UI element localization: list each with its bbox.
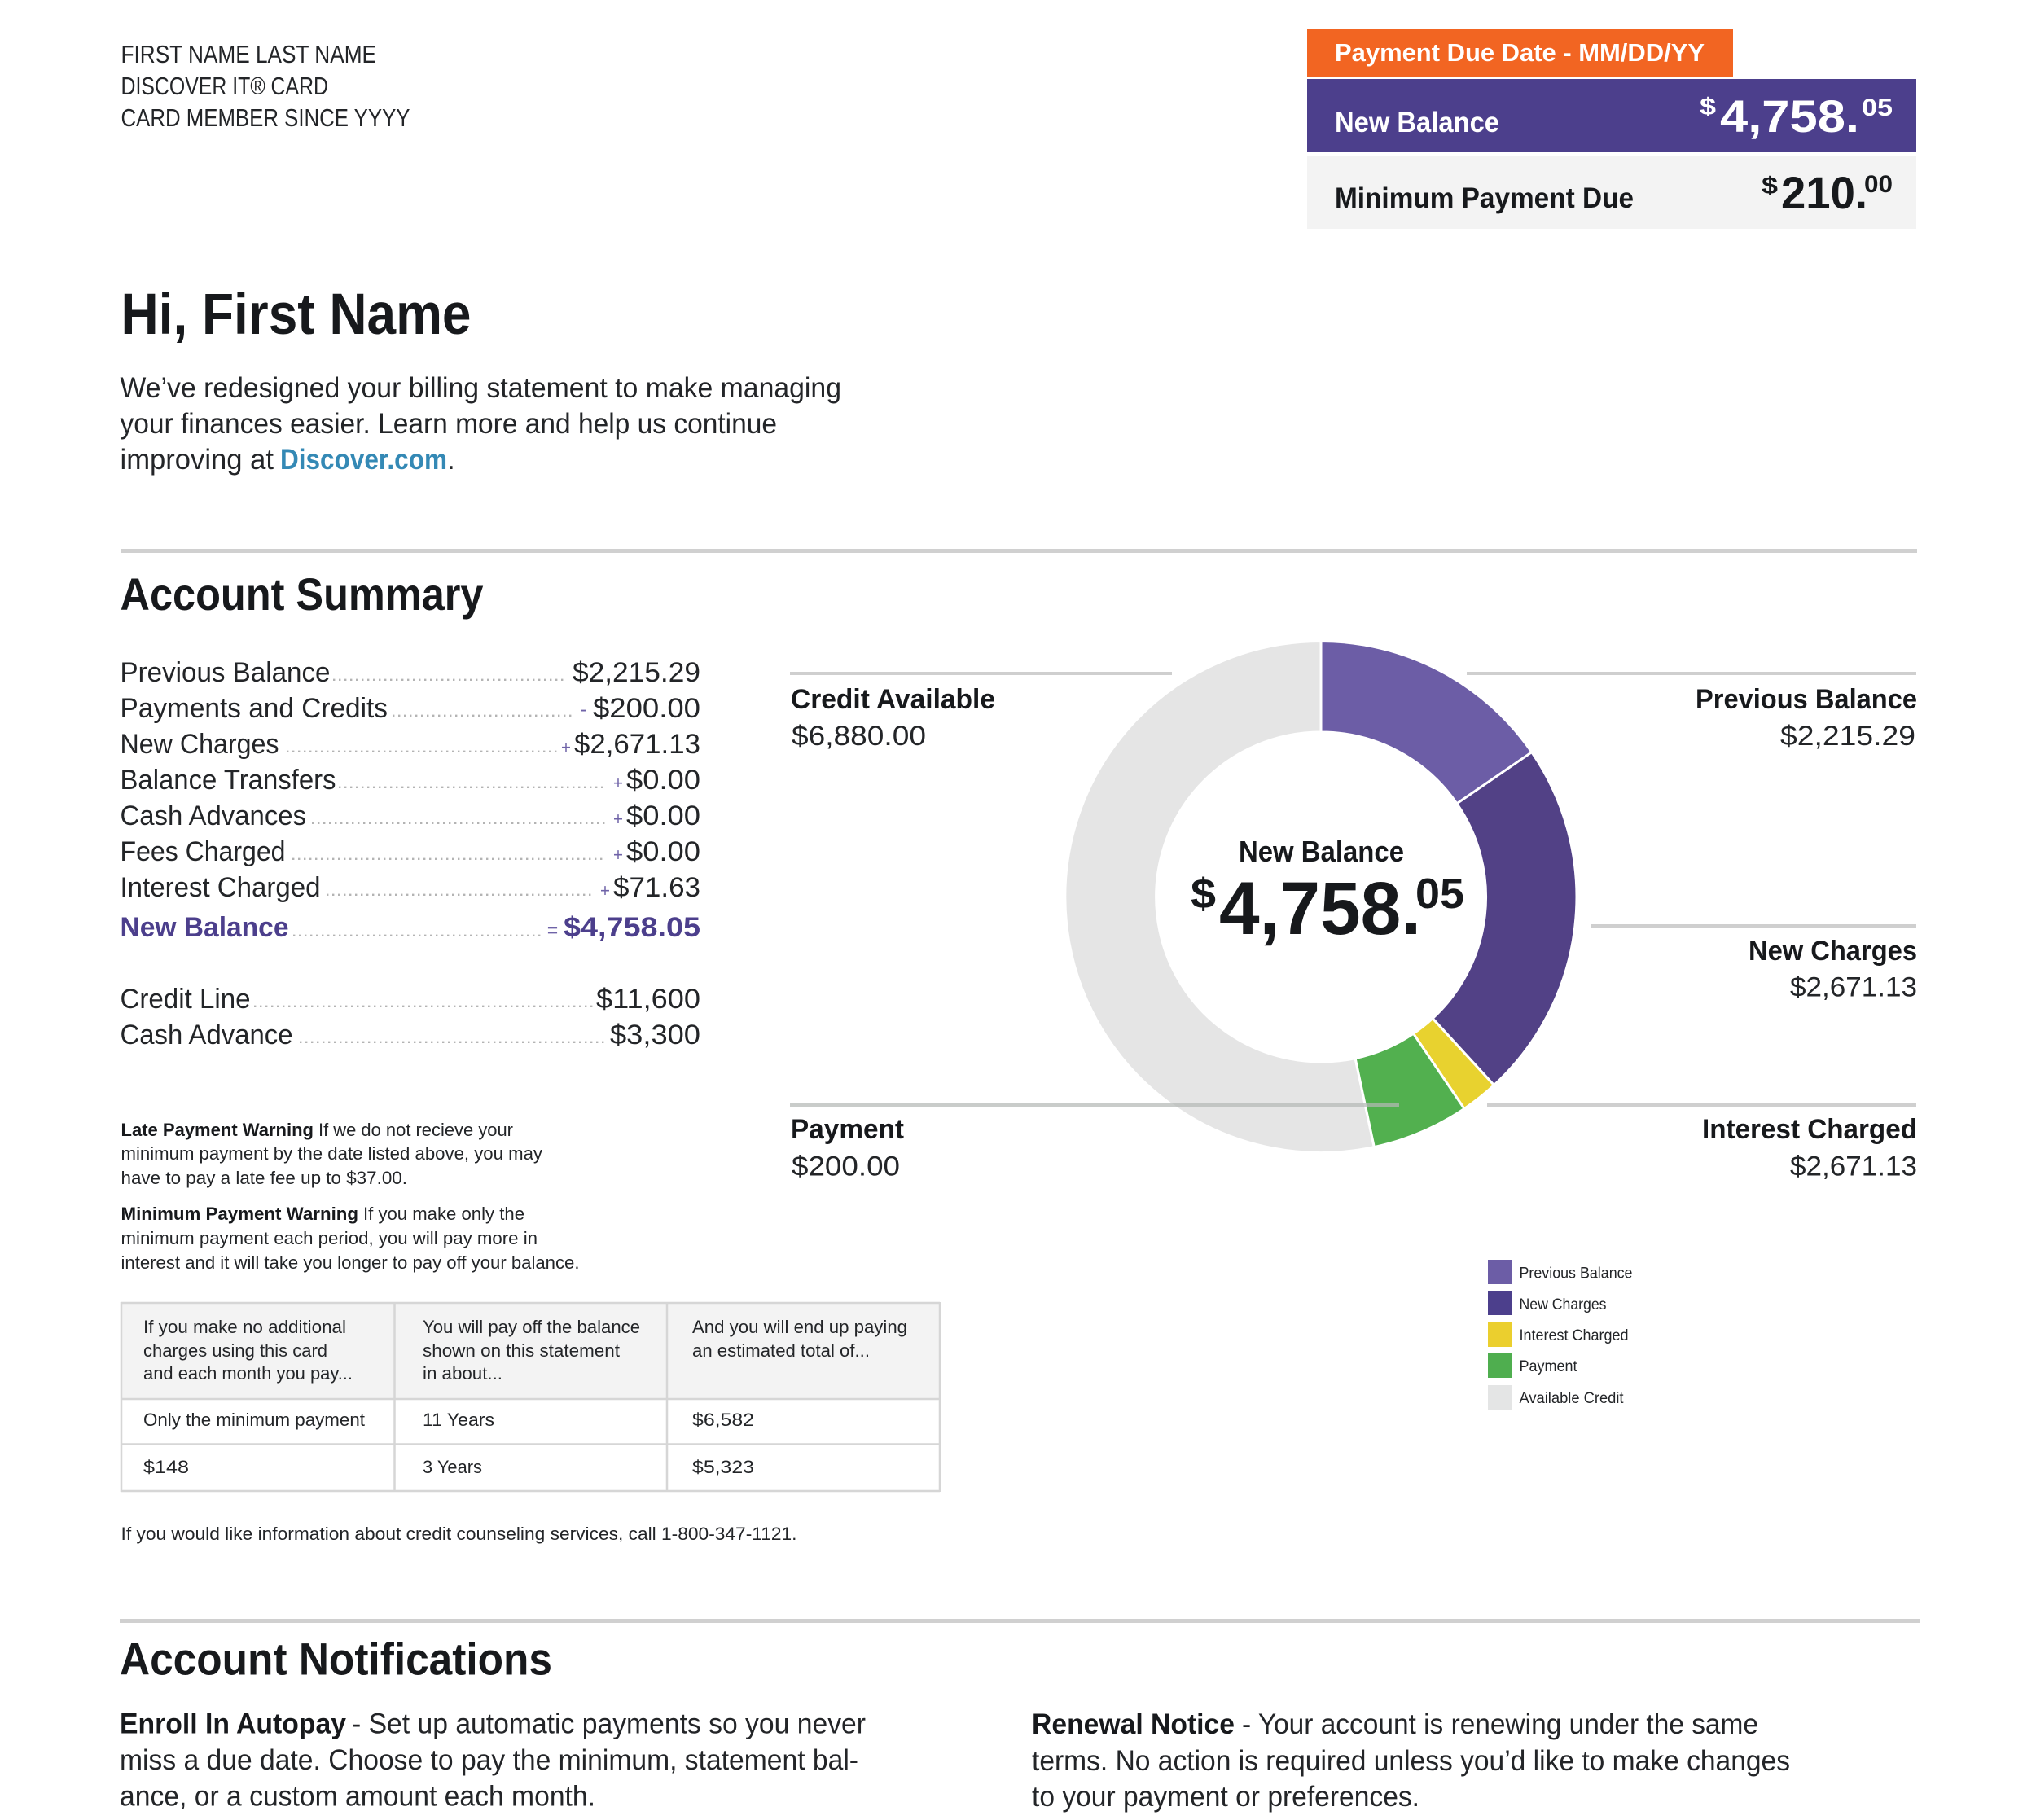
row: balance transfers: +	[613, 773, 623, 793]
minimum payment row: 210.	[1781, 167, 1867, 218]
card member block: CARD MEMBER SINCE YYYY	[121, 103, 410, 132]
intro paragraph: .	[447, 444, 455, 476]
intro paragraph: improving at	[121, 444, 274, 476]
row: previous balance	[121, 657, 700, 688]
row: payments and credits: $200.00	[593, 693, 700, 724]
callout: interest charged: $2,671.13	[1790, 1151, 1917, 1182]
row: new balance total: =	[547, 920, 558, 941]
row: interest charged: +	[600, 880, 610, 901]
panel: account summary ledger	[121, 657, 700, 1050]
callout: credit available: $6,880.00	[792, 721, 926, 752]
notice: enroll in autopay: miss a due date. Choose to pay the minimum, statement bal-	[120, 1744, 858, 1776]
minimum payment warning: Minimum Payment Warning	[121, 1204, 358, 1224]
row: cash advances: Cash Advances	[121, 800, 306, 831]
donut center label: 4,758.	[1219, 867, 1421, 950]
row: cash advances: $0.00	[626, 800, 700, 831]
row: payments and credits: -	[580, 699, 587, 721]
table: repayment estimates: charges using this card	[143, 1340, 327, 1361]
segment: interest charged	[1414, 1019, 1494, 1109]
row: new balance total	[121, 912, 700, 943]
intro paragraph: Discover.com	[280, 444, 447, 476]
chart legend: Available Credit	[1520, 1390, 1624, 1407]
notice: renewal: - Your account is renewing under the same	[1242, 1708, 1758, 1740]
late payment warning	[121, 1120, 542, 1188]
table: repayment estimates: You will pay off the balance	[423, 1317, 640, 1337]
callout: interest charged: Interest Charged	[1702, 1114, 1917, 1145]
intro paragraph: your finances easier. Learn more and help us continue	[121, 408, 777, 440]
minimum payment warning: interest and it will take you longer to pay off your balance.	[121, 1252, 580, 1273]
callout: new charges	[1591, 924, 1917, 1003]
minimum payment row: $	[1762, 173, 1778, 200]
notice: renewal	[1032, 1708, 1790, 1813]
new balance row: New Balance	[1335, 107, 1499, 138]
minimum payment warning: minimum payment each period, you will pay more in	[121, 1228, 538, 1248]
segment: new charges	[1433, 752, 1577, 1085]
callout: new charges: New Charges	[1749, 936, 1917, 967]
row: fees charged	[121, 836, 700, 867]
row: balance transfers	[121, 765, 700, 796]
row: new charges: $2,671.13	[574, 729, 700, 760]
notice: enroll in autopay: ance, or a custom amount each month.	[120, 1780, 595, 1813]
late payment warning: minimum payment by the date listed above, you may	[121, 1143, 542, 1164]
callout: credit available: Credit Available	[791, 684, 995, 715]
row: credit line	[121, 984, 700, 1015]
table: repayment estimates: 11 Years	[423, 1410, 494, 1430]
new balance row: 05	[1862, 94, 1893, 121]
panel: payment summary box	[1307, 29, 1916, 229]
payment due date banner	[1307, 29, 1733, 77]
minimum payment row: 00	[1864, 171, 1893, 198]
intro paragraph: We’ve redesigned your billing statement to make managing	[121, 372, 841, 404]
late payment warning: If we do not recieve your	[318, 1120, 513, 1140]
row: cash advance: Cash Advance	[121, 1020, 293, 1050]
donut center label: New Balance	[1239, 835, 1404, 868]
late payment warning: have to pay a late fee up to $37.00.	[121, 1168, 407, 1188]
row: balance transfers: Balance Transfers	[121, 765, 336, 796]
notice: enroll in autopay: Enroll In Autopay	[120, 1708, 347, 1739]
heading: account summary: Account Summary	[121, 568, 484, 620]
chart legend: Payment	[1520, 1358, 1577, 1375]
segment: payment	[1355, 1033, 1464, 1147]
row: fees charged: $0.00	[626, 836, 700, 867]
row: interest charged: $71.63	[613, 872, 700, 903]
row: previous balance: $2,215.29	[573, 657, 700, 688]
notice: renewal: to your payment or preferences.	[1032, 1781, 1419, 1813]
callout: credit available	[790, 672, 1172, 752]
table: repayment estimates: Only the minimum payment	[143, 1410, 365, 1430]
notice: enroll in autopay: - Set up automatic payments so you never	[352, 1708, 866, 1739]
row: interest charged: Interest Charged	[121, 872, 321, 903]
callout: previous balance	[1467, 672, 1917, 752]
row: new balance total: $4,758.05	[564, 912, 700, 943]
card member block: FIRST NAME LAST NAME	[121, 40, 376, 68]
notice: renewal: Renewal Notice	[1032, 1708, 1235, 1740]
chart legend	[1488, 1260, 1632, 1410]
callout: new charges: $2,671.13	[1790, 972, 1917, 1003]
callout: previous balance: $2,215.29	[1780, 721, 1915, 752]
minimum payment warning	[121, 1204, 580, 1273]
new balance row: $	[1700, 94, 1716, 121]
segment: available credit	[1065, 641, 1374, 1152]
table: repayment estimates: and each month you pay...	[143, 1363, 353, 1384]
new balance row	[1307, 79, 1916, 152]
chart legend: Previous Balance	[1520, 1265, 1632, 1282]
row: credit line: Credit Line	[121, 984, 251, 1015]
donut center label	[1191, 835, 1464, 950]
chart legend: New Charges	[1520, 1296, 1606, 1313]
minimum payment row	[1307, 156, 1916, 229]
table: repayment estimates: in about...	[423, 1363, 502, 1384]
callout: previous balance: Previous Balance	[1696, 684, 1917, 715]
row: previous balance: Previous Balance	[121, 657, 331, 688]
row: fees charged: Fees Charged	[121, 836, 285, 867]
callout: interest charged	[1487, 1103, 1917, 1182]
table: repayment estimates: And you will end up paying	[692, 1317, 907, 1337]
donut center label: 05	[1415, 871, 1464, 918]
callout: payment: $200.00	[792, 1151, 900, 1182]
row: cash advances: +	[613, 809, 623, 829]
row: new charges: +	[561, 737, 571, 757]
table: repayment estimates: $5,323	[692, 1457, 754, 1477]
row: new charges	[121, 729, 700, 760]
table: repayment estimates: $148	[143, 1457, 189, 1477]
minimum payment row: Minimum Payment Due	[1335, 182, 1634, 214]
card member block	[121, 40, 410, 132]
table: repayment estimates: shown on this statement	[423, 1340, 620, 1361]
table: repayment estimates: 3 Years	[423, 1457, 482, 1477]
row: cash advance: $3,300	[610, 1020, 700, 1050]
row: payments and credits	[121, 693, 700, 724]
minimum payment warning: If you make only the	[363, 1204, 524, 1224]
table: repayment estimates	[121, 1302, 940, 1492]
notice: renewal: terms. No action is required unless you’d like to make changes	[1032, 1745, 1790, 1777]
donut chart	[1065, 641, 1577, 1152]
table: repayment estimates: an estimated total of...	[692, 1340, 870, 1361]
payment due date banner: Payment Due Date - MM/DD/YY	[1335, 38, 1705, 67]
row: credit line: $11,600	[596, 984, 700, 1015]
credit counseling note: If you would like information about credit counseling services, call 1-800-347-1121.	[121, 1524, 796, 1544]
notice: enroll in autopay	[120, 1708, 866, 1813]
intro paragraph	[121, 372, 841, 476]
row: cash advance	[121, 1020, 700, 1050]
donut center label: $	[1191, 871, 1216, 918]
table: repayment estimates: $6,582	[692, 1410, 754, 1430]
row: new balance total: New Balance	[121, 912, 288, 943]
new balance row: 4,758.	[1720, 90, 1859, 142]
row: payments and credits: Payments and Credits	[121, 693, 388, 724]
table: repayment estimates: If you make no additional	[143, 1317, 346, 1337]
late payment warning: Late Payment Warning	[121, 1120, 314, 1140]
greeting heading: Hi, First Name	[121, 283, 471, 347]
chart legend: Interest Charged	[1520, 1327, 1629, 1344]
row: new charges: New Charges	[121, 729, 279, 760]
callout: payment	[790, 1103, 1399, 1182]
callout: payment: Payment	[791, 1114, 904, 1145]
heading: account notifications: Account Notifications	[120, 1634, 552, 1684]
row: interest charged	[121, 872, 700, 903]
row: cash advances	[121, 800, 700, 831]
row: fees charged: +	[613, 844, 623, 865]
segment: previous balance	[1321, 642, 1532, 804]
card member block: DISCOVER IT® CARD	[121, 72, 328, 100]
row: balance transfers: $0.00	[626, 765, 700, 796]
